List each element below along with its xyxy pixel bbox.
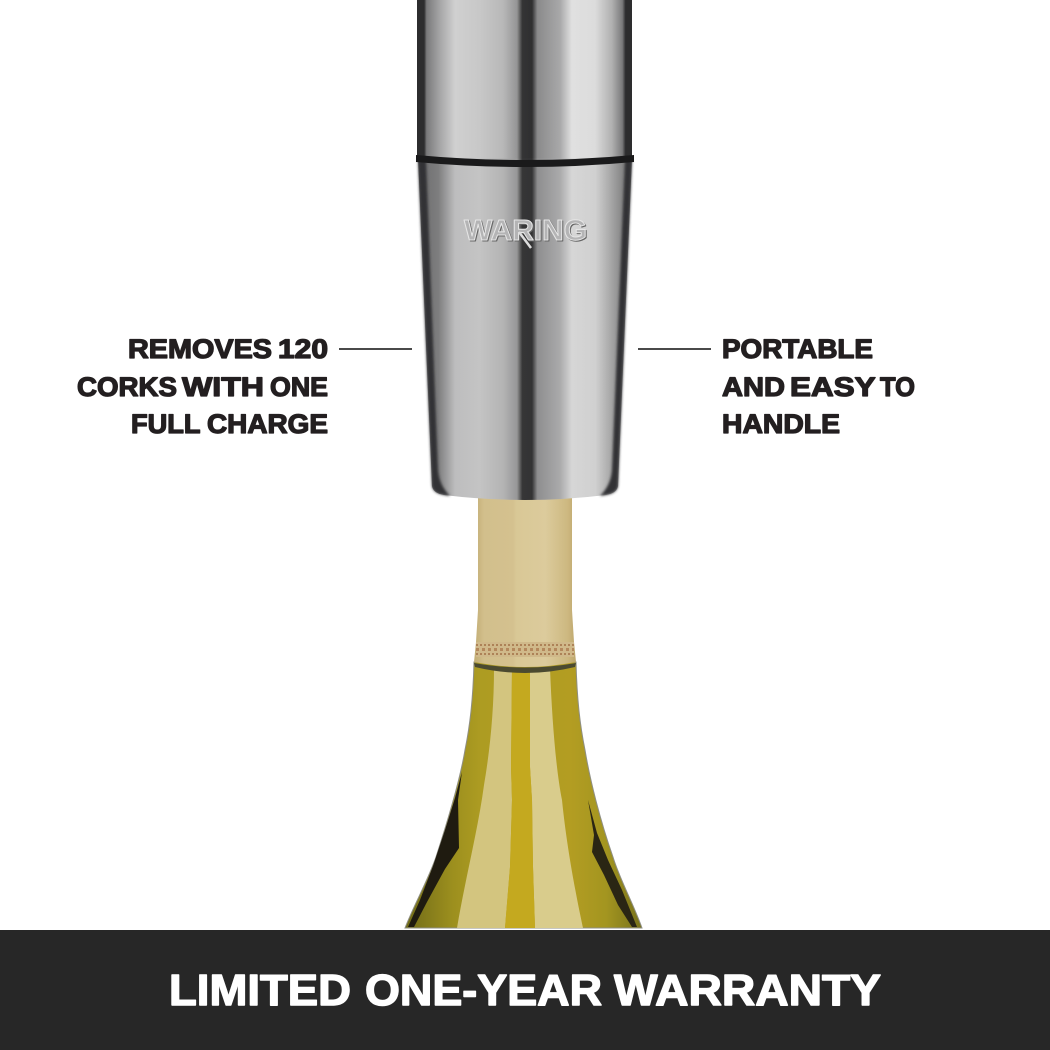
banner text: WARRANTY bbox=[614, 966, 881, 1015]
callout text: CHARGE bbox=[207, 409, 328, 439]
foil pattern band bbox=[476, 642, 574, 657]
lower body bbox=[418, 158, 632, 500]
liquid line bbox=[474, 663, 576, 673]
right edge shadow bbox=[600, 160, 632, 496]
callout text: REMOVES bbox=[128, 334, 272, 364]
wine bottle bbox=[405, 490, 642, 928]
upper body bbox=[417, 0, 632, 162]
banner text: ONE-YEAR bbox=[365, 966, 602, 1015]
device: electric wine opener bbox=[416, 0, 634, 500]
callout text: ONE bbox=[270, 372, 328, 402]
bottle glass bbox=[405, 662, 642, 928]
leader line right bbox=[638, 348, 711, 350]
callout text: HANDLE bbox=[722, 409, 840, 439]
glass centre band bbox=[505, 668, 535, 928]
brand mark: WARING bbox=[464, 215, 587, 247]
glass highlight left bbox=[457, 668, 512, 928]
left edge shadow bbox=[418, 160, 450, 496]
glass highlight right bbox=[530, 668, 583, 928]
callout text: 120 bbox=[278, 334, 328, 364]
dark shadow left bbox=[408, 772, 462, 927]
black ring bbox=[416, 155, 634, 167]
banner background bbox=[0, 930, 1050, 1050]
callout text: CORKS bbox=[77, 372, 177, 402]
callout text: EASY bbox=[790, 372, 876, 402]
callout text: TO bbox=[880, 372, 915, 402]
callout text: FULL bbox=[131, 409, 200, 439]
callout text: WITH bbox=[182, 372, 264, 402]
foil capsule bbox=[474, 490, 576, 667]
banner text: LIMITED bbox=[169, 966, 351, 1015]
callout text: AND bbox=[722, 372, 785, 402]
warranty banner bbox=[0, 930, 1050, 1050]
leader line left bbox=[339, 348, 412, 350]
callout: right bbox=[638, 334, 922, 439]
dark shadow right bbox=[588, 800, 637, 927]
callout: left bbox=[77, 334, 412, 439]
callout text: PORTABLE bbox=[722, 334, 873, 364]
